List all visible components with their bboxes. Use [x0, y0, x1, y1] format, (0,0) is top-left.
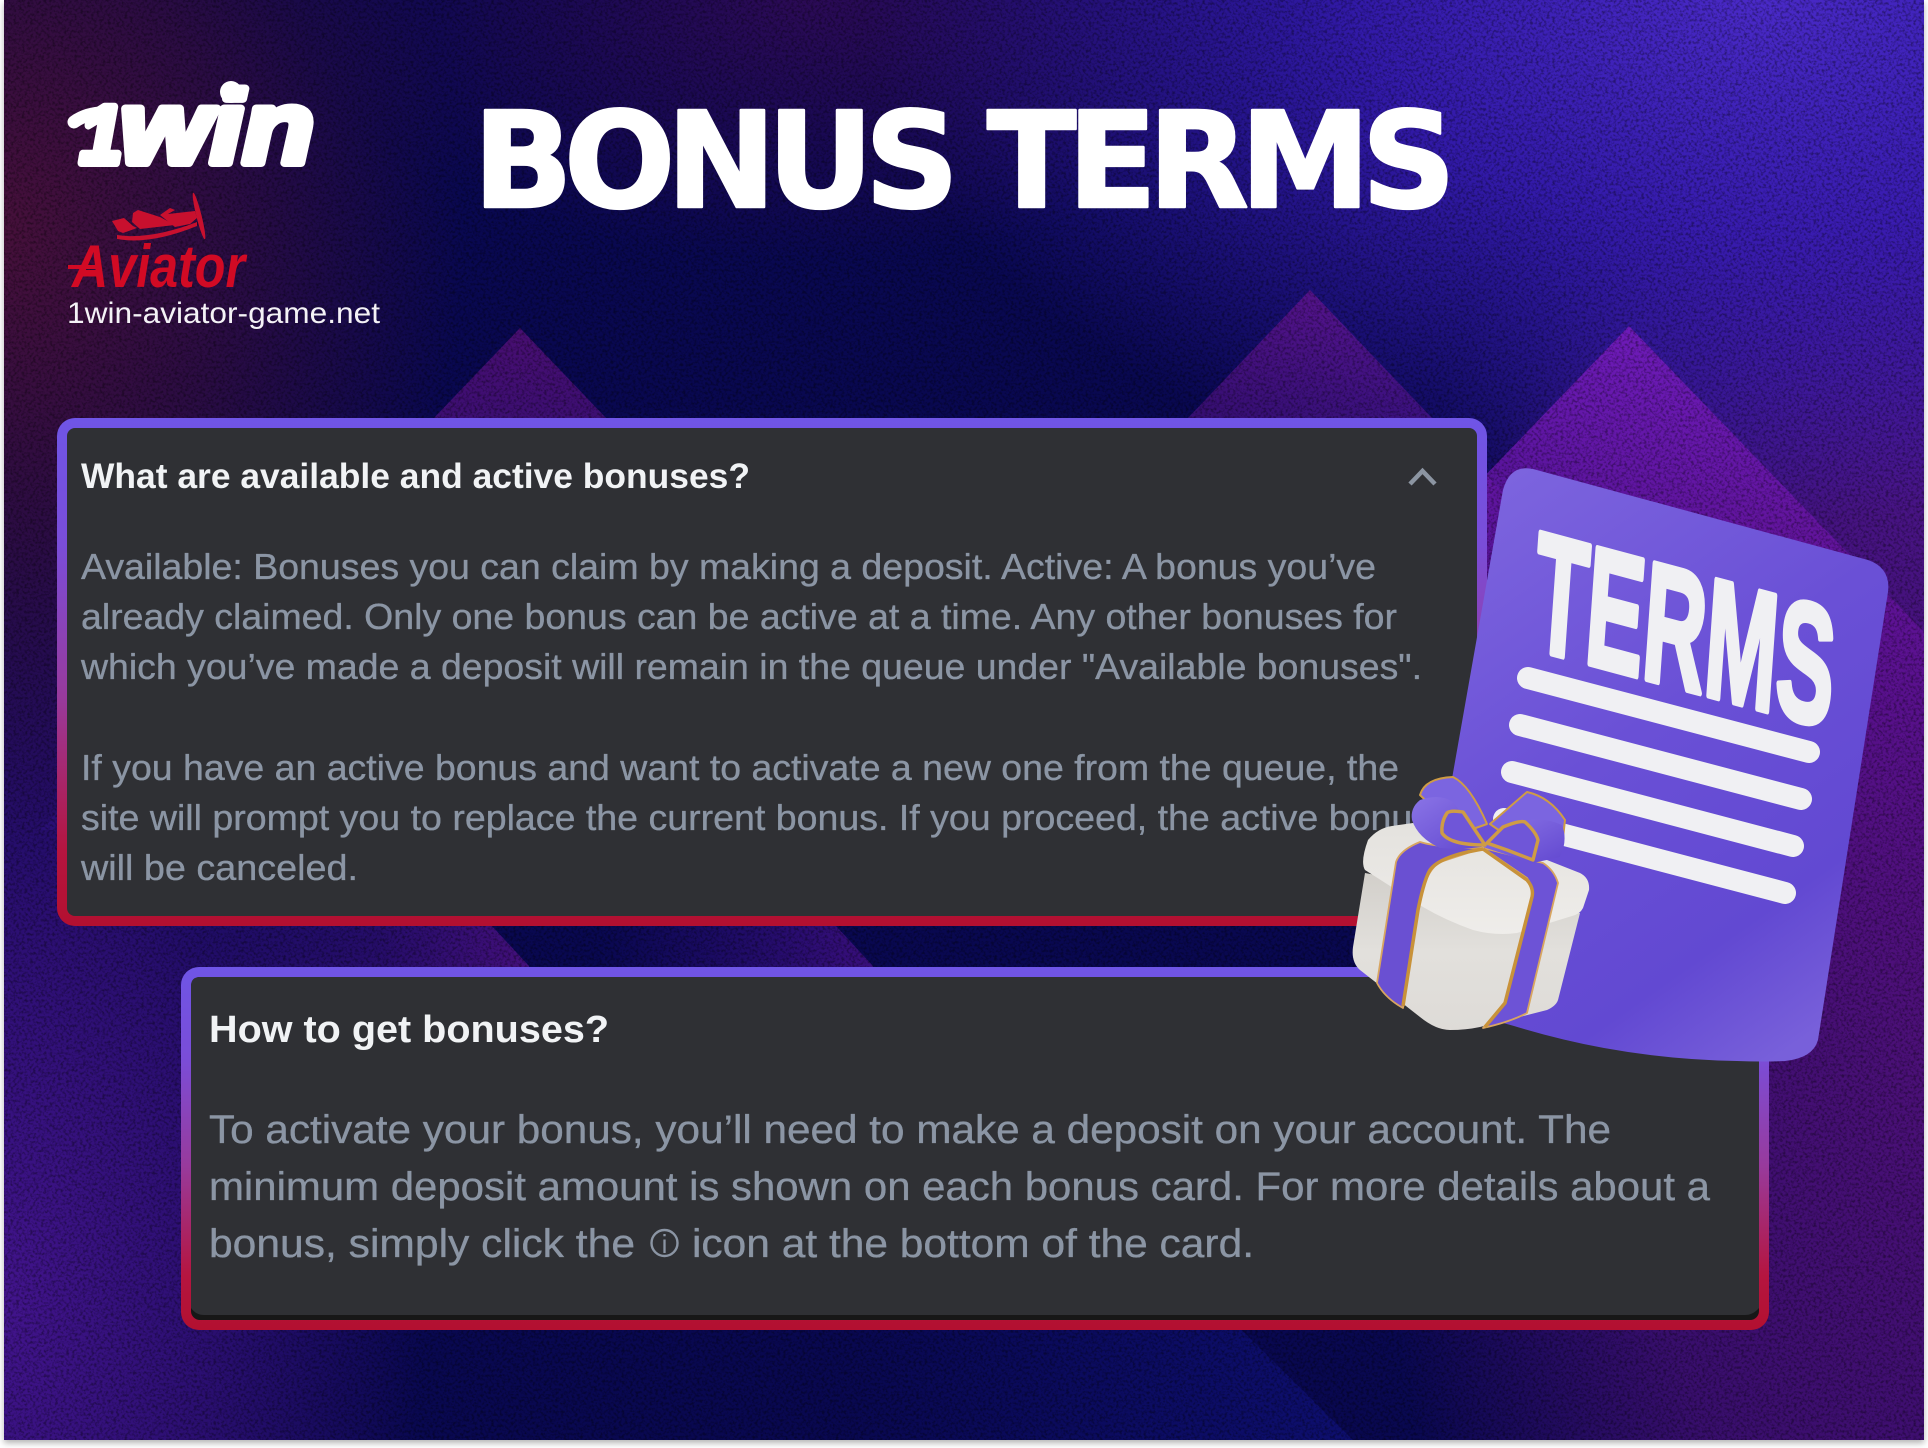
illustration: gift box: [1353, 777, 1589, 1030]
title: BONUS TERMS: [473, 84, 1447, 239]
body text: To activate your bonus, you’ll need to make a deposit on your account. The: [209, 1108, 1611, 1152]
icon: red plane: [112, 192, 207, 240]
Aviator logo: [68, 192, 248, 300]
icon: chevron up: [1410, 471, 1435, 484]
body text: Available: Bonuses you can claim by making a deposit. Active: A bonus you’ve: [81, 546, 1376, 587]
body text: If you have an active bonus and want to activate a new one from the queue, the: [81, 747, 1399, 788]
body text: which you’ve made a deposit will remain in the queue under "Available bonuses".: [80, 646, 1422, 687]
website url: 1win-aviator-game.net: [67, 297, 381, 330]
document lines: [1504, 678, 1809, 893]
heading: How to get bonuses?: [209, 1009, 609, 1051]
box lid: [1363, 823, 1589, 934]
panel: available and active bonuses: [57, 418, 1487, 926]
aviator wordmark: Aviator: [70, 233, 248, 300]
body text: site will prompt you to replace the current bonus. If you proceed, the active bonus: [81, 797, 1431, 838]
icon: info: i: [662, 1229, 667, 1259]
panel: how to get bonuses: [181, 967, 1769, 1330]
box body: [1353, 873, 1580, 1030]
ribbon bands: [1377, 842, 1558, 1028]
body text: already claimed. Only one bonus can be active at a time. Any other bonuses for: [81, 596, 1397, 637]
body text: icon at the bottom of the card.: [692, 1222, 1254, 1266]
body text: bonus, simply click the: [209, 1222, 635, 1266]
1win logo: 1: [80, 90, 122, 181]
bow: [1412, 777, 1565, 863]
illustration: terms document: [1425, 468, 1888, 1062]
body text: will be canceled.: [80, 847, 358, 888]
heading: What are available and active bonuses?: [81, 457, 750, 496]
body text: [80, 546, 1431, 888]
1win logo: win: [120, 70, 314, 185]
icon: info: [652, 1229, 678, 1259]
body text: minimum deposit amount is shown on each bonus card. For more details about a: [209, 1165, 1711, 1209]
background mountains: [40, 290, 1924, 1440]
body text: [209, 1108, 1711, 1266]
